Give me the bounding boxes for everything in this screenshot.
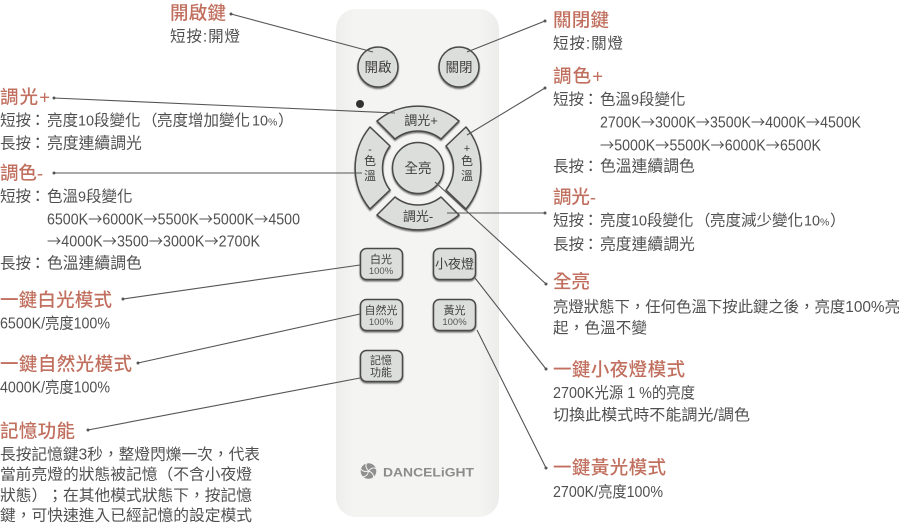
callout: full brightness: 起，色溫不變 [553, 319, 647, 337]
callout: colour up: 色溫連續調色 [600, 158, 695, 176]
button: natural light: 100% [369, 317, 394, 328]
callout: colour down: ： [30, 188, 46, 206]
callout: dim up: 段變化 [94, 112, 141, 130]
callout: dim up: 10 [78, 114, 94, 130]
callout: dim up: 短按 [0, 112, 31, 130]
button: on [358, 47, 398, 87]
callout: memory function: 當前亮燈的狀態被記憶（不含小夜燈 [0, 466, 252, 484]
callout: dim down: 調光- [553, 186, 596, 208]
callout: memory function [0, 420, 260, 524]
button: natural light [360, 300, 402, 330]
indicator light [356, 100, 364, 108]
callout: night light mode: 2700K光源 1 %的亮度 [553, 384, 695, 402]
callout: colour down: 長按 [0, 254, 31, 272]
callout: dim up: ） [278, 112, 294, 130]
remote control body [336, 9, 499, 517]
callout: dim up: ： [30, 112, 46, 130]
callout: white light mode [0, 290, 112, 332]
callout: natural light mode: 一鍵自然光模式 [0, 354, 132, 374]
callout: colour down: 段變化 [86, 188, 133, 206]
callout: dim down: 段變化 [647, 212, 694, 230]
d-pad: colour up: 色 [461, 154, 473, 168]
callout: memory function: 鍵，可快速進入已經記憶的設定模式 [0, 506, 252, 524]
button: yellow light [434, 300, 476, 330]
callout: off key: 短按:關燈 [553, 34, 623, 52]
button: yellow light: 黃光 [444, 303, 466, 317]
button: full brightness [392, 142, 444, 194]
callout: dim down: 10 [631, 214, 647, 230]
brand logo: DANCELiGHT [383, 466, 475, 480]
d-pad: dim up: 調光+ [404, 113, 438, 128]
callout: memory function: 長按記憶鍵3秒，整燈閃爍一次，代表 [0, 446, 260, 464]
d-pad: colour down: 溫 [364, 169, 376, 183]
callout: dim down: （ [695, 212, 711, 230]
callout: full brightness: 全亮 [553, 271, 590, 292]
d-pad: colour up: + [464, 143, 470, 155]
button: night light: 小夜燈 [435, 256, 474, 272]
callout: dim down: 亮度 [600, 212, 631, 230]
callout: dim down: 短按 [553, 212, 584, 230]
callout: colour up: 長按 [553, 158, 584, 176]
callout: colour down: 短按 [0, 188, 31, 206]
callout: colour down: 6500K→6000K→5500K→5000K→4500 [47, 208, 300, 230]
callout: dim down: 亮度減少變化 [710, 212, 803, 230]
callout: dim up: 亮度增加變化 [157, 112, 250, 130]
callout: full brightness: 亮燈狀態下，任何色溫下按此鍵之後，亮度100%亮 [553, 298, 900, 316]
callout: memory function: 狀態）；在其他模式狀態下，按記憶 [0, 486, 252, 504]
callout: colour up: 9 [631, 92, 639, 108]
button: yellow light: 100% [442, 317, 467, 328]
brand logo [360, 463, 475, 480]
callout: colour up: 色溫 [600, 90, 631, 108]
callout: on key: 開啟鍵 [170, 2, 226, 24]
callout: colour down: 色溫連續調色 [47, 254, 142, 272]
callout: dim up: 10 [252, 114, 268, 130]
callout: dim down: 亮度連續調光 [600, 236, 695, 254]
callout: off key: 關閉鍵 [553, 10, 609, 30]
callout: colour up: ： [583, 92, 599, 108]
callout: full brightness [553, 271, 900, 337]
callout: dim down: 10 [804, 214, 820, 230]
callout: natural light mode [0, 354, 132, 396]
button: off: 關閉 [446, 60, 472, 75]
callout: natural light mode: 4000K/亮度100% [0, 378, 110, 396]
callout: dim down: 長按 [553, 236, 584, 254]
d-pad: colour down: 色 [364, 154, 376, 168]
callout: white light mode: 6500K/亮度100% [0, 314, 110, 332]
button: on: 開啟 [364, 60, 392, 75]
callout: colour up: 調色+ [553, 66, 603, 86]
d-pad: colour down: - [368, 144, 372, 156]
callout: night light mode [553, 359, 750, 424]
callout: dim up: 亮度 [47, 112, 78, 130]
d-pad: colour up: 溫 [461, 169, 473, 183]
callout: dim down: ： [583, 236, 599, 254]
callout: dim up: （ [142, 112, 158, 130]
callout: dim up: 亮度連續調光 [47, 134, 142, 152]
callout: colour up: 2700K→3000K→3500K→4000K→4500K [600, 110, 862, 132]
d-pad: colour up [446, 127, 481, 209]
callout: colour down: ： [30, 256, 46, 272]
callout: on key: 短按:開燈 [170, 28, 240, 46]
callout: colour up: 段變化 [639, 90, 686, 108]
button: memory: 功能 [370, 366, 392, 379]
callout: night light mode: 一鍵小夜燈模式 [553, 359, 685, 380]
callout: dim down [553, 186, 846, 254]
callout: dim up: 調光+ [0, 86, 50, 108]
callout: dim up: 長按 [0, 134, 31, 152]
callout: yellow light mode [553, 457, 666, 501]
callout: colour down: →4000K→3500→3000K→2700K [47, 230, 261, 252]
callout: colour down: 調色- [0, 162, 43, 184]
d-pad: dim up [377, 106, 459, 139]
callout: yellow light mode: 一鍵黃光模式 [553, 457, 666, 478]
callout: dim down: ： [583, 212, 599, 230]
d-pad: colour down [355, 127, 390, 209]
callout: on key [170, 2, 240, 46]
button: white light [360, 248, 402, 280]
callout: colour up: →5000K→5500K→6000K→6500K [600, 134, 822, 156]
button: natural light: 自然光 [364, 303, 398, 317]
callout: colour down [0, 162, 300, 272]
callout: white light mode: 一鍵白光模式 [0, 290, 112, 310]
button: white light: 白光 [370, 252, 392, 266]
button: white light: 100% [369, 266, 394, 277]
callout: night light mode: 切換此模式時不能調光/調色 [553, 406, 750, 424]
button: memory: 記憶 [370, 353, 392, 367]
callout: memory function: 記憶功能 [0, 420, 75, 442]
callout: colour down: 9 [78, 190, 86, 206]
callout: colour up: 短按 [553, 90, 584, 108]
callout: colour down: 色溫 [47, 188, 78, 206]
button: memory [360, 350, 402, 382]
callout: colour up: ： [583, 158, 599, 176]
callout: colour up [553, 66, 862, 176]
leader lines [52, 12, 548, 470]
d-pad: dim down: 調光- [403, 209, 433, 224]
callout: dim up: ： [30, 136, 46, 152]
d-pad: dim down [377, 197, 459, 230]
button: night light [434, 248, 476, 280]
button: off [439, 47, 479, 87]
callout: dim down: % [820, 216, 829, 228]
button: full brightness: 全亮 [404, 160, 432, 176]
callout: dim down: ） [830, 212, 846, 230]
callout: dim up [0, 86, 294, 152]
callout: dim up: % [268, 116, 277, 128]
callout: yellow light mode: 2700K/亮度100% [553, 483, 663, 501]
callout: off key [553, 10, 623, 52]
